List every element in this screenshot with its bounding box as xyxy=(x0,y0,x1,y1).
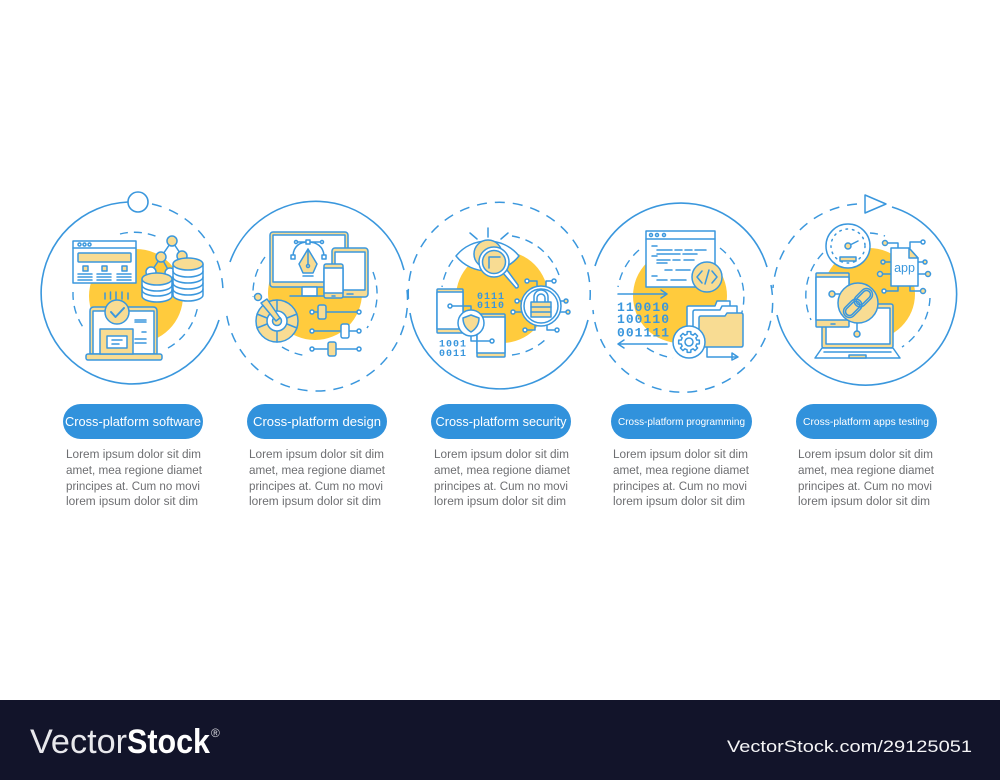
outer ring with node xyxy=(41,192,223,384)
inner dashed ring xyxy=(442,236,559,355)
panel: cross-platform software illustration xyxy=(41,192,223,384)
text block: software description: Lorem ipsum dolor sit dim xyxy=(66,447,201,461)
inner dashed ring xyxy=(806,233,930,347)
icon: tablets with shield xyxy=(437,289,505,357)
text block: programming description: lorem ipsum dolor sit dim xyxy=(613,494,745,508)
binary text: 0110 xyxy=(477,301,504,312)
text block: design description xyxy=(249,447,386,508)
panel: cross-platform design illustration xyxy=(226,201,408,391)
icon: database stacks xyxy=(142,258,203,302)
icon: sliders xyxy=(310,305,361,356)
icon: monitor with pen tool xyxy=(270,232,348,296)
text block: design description: principes at. Cum no movi xyxy=(249,479,383,493)
panel: cross-platform security illustration xyxy=(408,202,590,389)
footer banner: VectorStock.com/29125051 xyxy=(727,737,972,756)
icon: padlock with circuit xyxy=(511,279,570,332)
outer ring xyxy=(408,202,590,389)
text block: security description: amet, mea regione diamet xyxy=(434,463,571,477)
icon: eye with magnifier xyxy=(456,228,519,288)
icon: right arrow xyxy=(618,290,667,298)
footer banner: Vector xyxy=(30,723,127,761)
text block: apps testing description: lorem ipsum dolor sit dim xyxy=(798,494,930,508)
binary text: 0011 xyxy=(439,349,466,360)
binary text: 100110 xyxy=(617,312,669,327)
icon: browser window xyxy=(73,241,136,283)
yellow circle xyxy=(456,251,548,343)
text block: programming description: Lorem ipsum dolor sit dim xyxy=(613,447,748,461)
footer banner: ® xyxy=(211,726,220,740)
text block: apps testing description: amet, mea regione diamet xyxy=(798,463,935,477)
label: cross-platform security xyxy=(431,404,571,439)
text block: security description: principes at. Cum no movi xyxy=(434,479,568,493)
label: cross-platform programming xyxy=(611,404,752,439)
inner dashed ring xyxy=(253,257,377,356)
text block: design description: amet, mea regione diamet xyxy=(249,463,386,477)
icon: left arrow xyxy=(618,340,667,348)
binary text xyxy=(617,300,669,340)
text block: software description: principes at. Cum no movi xyxy=(66,479,200,493)
text block: programming description xyxy=(613,447,750,508)
text block: programming description: amet, mea regione diamet xyxy=(613,463,750,477)
text block: apps testing description: Lorem ipsum dolor sit dim xyxy=(798,447,933,461)
label: cross-platform apps testing xyxy=(796,404,937,439)
icon: folders xyxy=(687,301,743,360)
icon: laptop xyxy=(815,304,900,358)
text block: security description: Lorem ipsum dolor sit dim xyxy=(434,447,569,461)
icon: color wheel and eyedropper xyxy=(254,294,298,342)
outer ring xyxy=(226,201,408,391)
inner dashed ring xyxy=(618,248,744,358)
outer ring with triangle xyxy=(773,195,957,385)
icon: chain link badge xyxy=(838,283,878,323)
footer banner xyxy=(0,700,1000,780)
icon: network nodes xyxy=(146,236,187,278)
label: cross-platform security: Cross-platform security xyxy=(436,414,567,429)
text block: apps testing description: principes at. Cum no movi xyxy=(798,479,932,493)
label: cross-platform design: Cross-platform design xyxy=(253,414,381,429)
text block: software description xyxy=(66,447,203,508)
yellow circle xyxy=(268,246,362,340)
text block: software description: lorem ipsum dolor sit dim xyxy=(66,494,198,508)
binary text: 110010 xyxy=(617,300,669,315)
inner dashed ring xyxy=(73,232,198,348)
outer ring xyxy=(593,203,773,392)
text block: design description: lorem ipsum dolor sit dim xyxy=(249,494,381,508)
text block: design description: Lorem ipsum dolor sit dim xyxy=(249,447,384,461)
text block: apps testing description xyxy=(798,447,935,508)
icon: laptop with check badge xyxy=(86,292,162,360)
binary text: 0111 xyxy=(477,292,504,303)
yellow circle xyxy=(89,249,183,343)
text block: software description: amet, mea regione diamet xyxy=(66,463,203,477)
icon: code window xyxy=(646,231,722,292)
icon: connector nodes xyxy=(829,291,860,337)
panel: cross-platform programming illustration xyxy=(593,203,773,392)
yellow circle xyxy=(633,249,727,343)
binary text: 001111 xyxy=(617,326,669,340)
label: cross-platform software: Cross-platform software xyxy=(65,414,201,429)
text block: security description: lorem ipsum dolor sit dim xyxy=(434,494,566,508)
icon: tablet and phone xyxy=(324,248,368,298)
icon: app file with circuit xyxy=(878,240,930,294)
label: cross-platform design xyxy=(247,404,387,439)
binary text xyxy=(439,340,466,360)
panel: cross-platform apps testing illustration xyxy=(773,195,957,385)
icon: app file with circuit: app xyxy=(894,261,915,275)
icon: tablet xyxy=(816,273,849,327)
yellow circle xyxy=(823,248,915,340)
label: cross-platform software xyxy=(63,404,203,439)
binary text xyxy=(477,292,504,312)
icon: gear badge xyxy=(673,326,705,358)
text block: security description xyxy=(434,447,571,508)
icon: speedometer xyxy=(826,224,870,268)
label: cross-platform programming: Cross-platform programming xyxy=(618,416,745,428)
footer banner: Stock xyxy=(127,723,210,761)
binary text: 1001 xyxy=(439,340,466,350)
text block: programming description: principes at. Cum no movi xyxy=(613,479,747,493)
label: cross-platform apps testing: Cross-platform apps testing xyxy=(803,416,929,428)
